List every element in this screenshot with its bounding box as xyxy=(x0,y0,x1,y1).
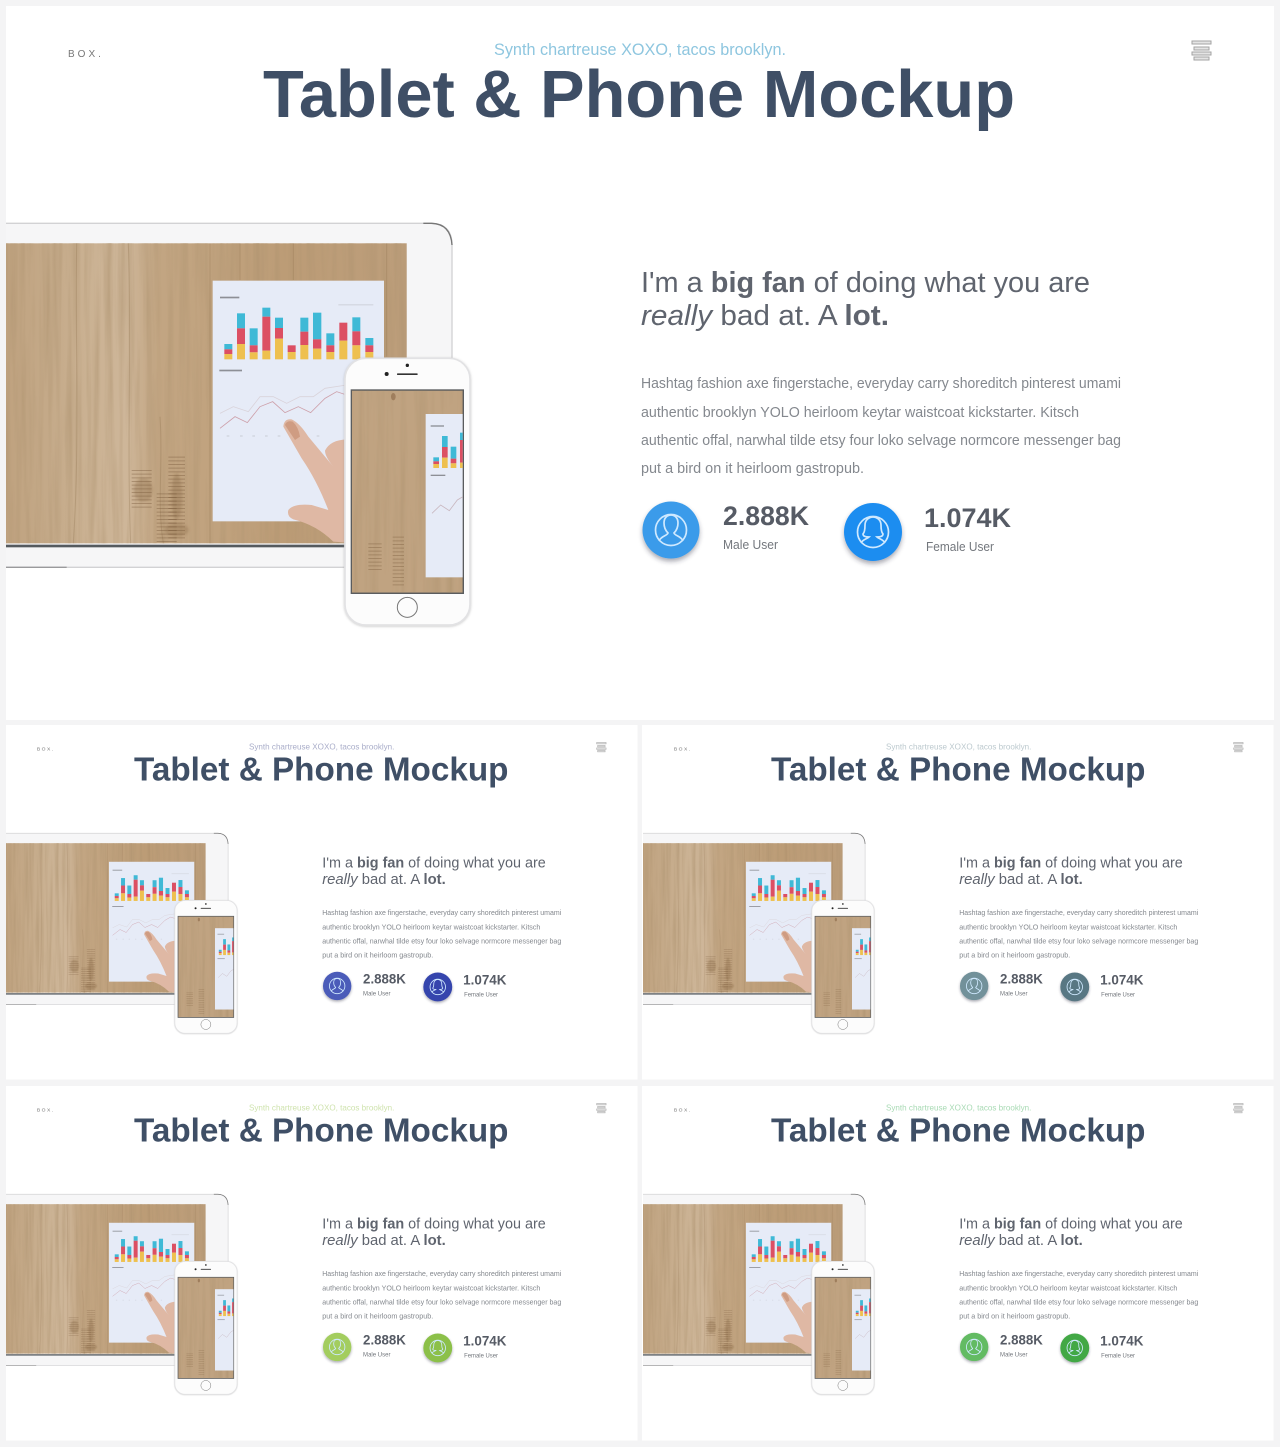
stat: female user: 1.074K xyxy=(1100,1333,1144,1348)
stat: male user: Male User xyxy=(1000,990,1028,997)
subtitle: Synth chartreuse XOXO, tacos brooklyn. xyxy=(249,741,394,751)
heading: I'm a big fan of doing what you are xyxy=(322,1216,546,1232)
body text: Hashtag fashion axe fingerstache, everyday carry shoreditch pinterest umami xyxy=(641,376,1121,392)
stat: male user: 2.888K xyxy=(1000,1332,1043,1347)
body text: put a bird on it heirloom gastropub. xyxy=(322,951,433,960)
body text: authentic brooklyn YOLO heirloom keytar waistcoat kickstarter. Kitsch xyxy=(322,923,540,932)
stat: male user: 2.888K xyxy=(363,1332,406,1347)
stat: male user xyxy=(323,1332,406,1361)
brand label: BOX. xyxy=(674,746,692,752)
brand label: BOX. xyxy=(37,746,55,752)
stat: male user xyxy=(323,971,406,1000)
panel: indigo slide xyxy=(6,725,637,1080)
heading: I'm a big fan of doing what you are xyxy=(959,855,1183,871)
stat: male user xyxy=(960,971,1043,1000)
heading: really bad at. A lot. xyxy=(641,300,889,332)
body text: Hashtag fashion axe fingerstache, everyday carry shoreditch pinterest umami xyxy=(959,1269,1199,1278)
body text xyxy=(959,908,1199,960)
body text: put a bird on it heirloom gastropub. xyxy=(322,1312,433,1321)
body text: authentic offal, narwhal tilde etsy four loko selvage normcore messenger bag xyxy=(322,1298,561,1307)
heading: I'm a big fan of doing what you are xyxy=(322,855,546,871)
device mockup: tablet and phone xyxy=(643,1194,874,1394)
stat: female user xyxy=(1060,972,1144,1001)
subtitle: Synth chartreuse XOXO, tacos brooklyn. xyxy=(886,741,1031,751)
stat: female user: Female User xyxy=(464,1352,499,1359)
stat: female user xyxy=(423,1333,507,1362)
title: Tablet & Phone Mockup xyxy=(134,1112,508,1149)
stat: male user: Male User xyxy=(363,1351,391,1358)
title: Tablet & Phone Mockup xyxy=(263,57,1015,132)
subtitle: Synth chartreuse XOXO, tacos brooklyn. xyxy=(494,40,786,59)
body text: put a bird on it heirloom gastropub. xyxy=(959,1312,1070,1321)
icon: menu xyxy=(597,1103,606,1113)
device mockup: tablet and phone xyxy=(6,833,237,1033)
stat: male user: 2.888K xyxy=(1000,971,1043,986)
stat: female user xyxy=(844,503,1011,561)
icon: menu xyxy=(1234,1103,1243,1113)
heading xyxy=(959,1216,1183,1249)
heading: I'm a big fan of doing what you are xyxy=(641,267,1090,299)
device mockup: tablet and phone xyxy=(6,223,470,625)
body text: put a bird on it heirloom gastropub. xyxy=(959,951,1070,960)
stat: male user: Male User xyxy=(1000,1351,1028,1358)
body text: authentic brooklyn YOLO heirloom keytar waistcoat kickstarter. Kitsch xyxy=(641,405,1079,421)
heading xyxy=(959,855,1183,888)
stat: female user: Female User xyxy=(926,539,995,554)
stat: female user: 1.074K xyxy=(463,972,507,987)
brand label: BOX. xyxy=(68,49,104,60)
body text: authentic offal, narwhal tilde etsy four loko selvage normcore messenger bag xyxy=(959,1298,1198,1307)
icon: menu xyxy=(1234,742,1243,752)
body text xyxy=(641,376,1121,477)
panel: green slide xyxy=(642,1086,1273,1441)
stat: female user: Female User xyxy=(1101,1352,1136,1359)
title: Tablet & Phone Mockup xyxy=(771,1112,1145,1149)
panel: lime slide xyxy=(6,1086,637,1441)
heading: really bad at. A lot. xyxy=(322,872,446,888)
stat: female user: 1.074K xyxy=(924,503,1011,533)
heading: really bad at. A lot. xyxy=(959,1233,1083,1249)
stat: male user xyxy=(642,501,809,558)
stat: female user: 1.074K xyxy=(1100,972,1144,987)
heading xyxy=(641,267,1090,332)
heading: really bad at. A lot. xyxy=(322,1233,446,1249)
body text xyxy=(322,908,562,960)
body text: Hashtag fashion axe fingerstache, everyday carry shoreditch pinterest umami xyxy=(959,908,1199,917)
stat: female user xyxy=(1060,1333,1144,1362)
body text: authentic brooklyn YOLO heirloom keytar waistcoat kickstarter. Kitsch xyxy=(959,1284,1177,1293)
device mockup: tablet and phone xyxy=(643,833,874,1033)
icon: menu xyxy=(1192,41,1211,60)
body text: put a bird on it heirloom gastropub. xyxy=(641,461,864,477)
panel: slate slide xyxy=(642,725,1273,1080)
brand label: BOX. xyxy=(37,1107,55,1113)
heading: I'm a big fan of doing what you are xyxy=(959,1216,1183,1232)
stat: female user xyxy=(423,972,507,1001)
title: Tablet & Phone Mockup xyxy=(771,751,1145,788)
body text: Hashtag fashion axe fingerstache, everyday carry shoreditch pinterest umami xyxy=(322,1269,562,1278)
subtitle: Synth chartreuse XOXO, tacos brooklyn. xyxy=(886,1102,1031,1112)
body text xyxy=(959,1269,1199,1321)
stat: male user: Male User xyxy=(723,537,779,552)
title: Tablet & Phone Mockup xyxy=(134,751,508,788)
device mockup: tablet and phone xyxy=(6,1194,237,1394)
body text: authentic brooklyn YOLO heirloom keytar waistcoat kickstarter. Kitsch xyxy=(959,923,1177,932)
stat: female user: Female User xyxy=(1101,991,1136,998)
body text: Hashtag fashion axe fingerstache, everyday carry shoreditch pinterest umami xyxy=(322,908,562,917)
stat: male user: 2.888K xyxy=(363,971,406,986)
stat: male user: Male User xyxy=(363,990,391,997)
body text: authentic offal, narwhal tilde etsy four loko selvage normcore messenger bag xyxy=(322,937,561,946)
panel: main slide xyxy=(6,6,1274,720)
body text: authentic offal, narwhal tilde etsy four loko selvage normcore messenger bag xyxy=(959,937,1198,946)
stat: male user: 2.888K xyxy=(723,501,809,531)
stat: female user: Female User xyxy=(464,991,499,998)
body text xyxy=(322,1269,562,1321)
subtitle: Synth chartreuse XOXO, tacos brooklyn. xyxy=(249,1102,394,1112)
brand label: BOX. xyxy=(674,1107,692,1113)
stat: male user xyxy=(960,1332,1043,1361)
heading xyxy=(322,855,546,888)
icon: menu xyxy=(597,742,606,752)
heading: really bad at. A lot. xyxy=(959,872,1083,888)
stat: female user: 1.074K xyxy=(463,1333,507,1348)
body text: authentic offal, narwhal tilde etsy four loko selvage normcore messenger bag xyxy=(641,433,1121,449)
heading xyxy=(322,1216,546,1249)
body text: authentic brooklyn YOLO heirloom keytar waistcoat kickstarter. Kitsch xyxy=(322,1284,540,1293)
